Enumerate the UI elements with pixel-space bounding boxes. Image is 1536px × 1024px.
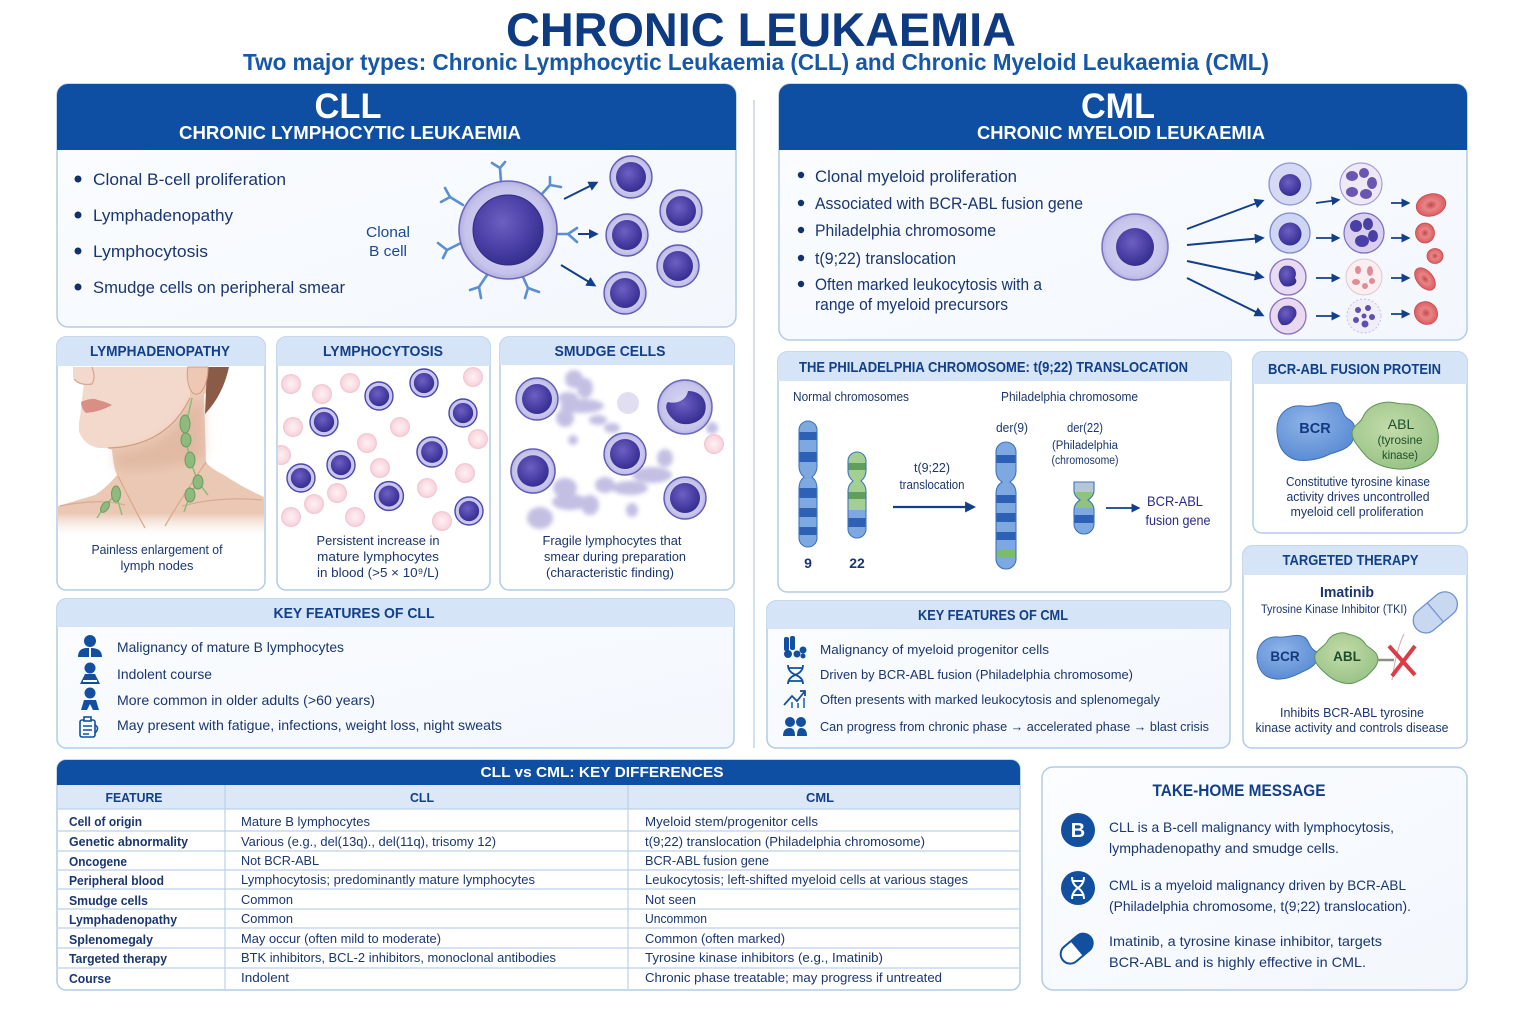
shadow under the jaw (112, 400, 205, 470)
diagram: fusion protein blobs: ABL (1388, 416, 1414, 432)
CML bullet list: Clonal myeloid proliferation (815, 167, 1017, 186)
table rows: Lymphadenopathy (69, 913, 177, 927)
title: CHRONIC LEUKAEMIA (506, 3, 1016, 56)
diagram: BCR-ABL inhibited: ABL (1333, 649, 1361, 664)
table rows: Cell of origin (69, 815, 142, 829)
panel: Philadelphia chromosome: THE PHILADELPHIA CHROMOSOME: t(9;22) TRANSLOCATION (799, 359, 1188, 376)
table rows: Mature B lymphocytes (241, 815, 370, 829)
table rows: Not BCR-ABL (241, 854, 319, 868)
message: imatinib: BCR-ABL and is highly effective in CML. (1109, 954, 1366, 970)
chromosome numbers (804, 555, 865, 571)
translocation label: t(9;22) (914, 461, 950, 475)
icon: B badge (1061, 813, 1095, 847)
panel: Philadelphia chromosome (778, 352, 1231, 592)
hair (205, 367, 229, 414)
caption: kinase activity and controls disease (1256, 721, 1449, 735)
table rows: Splenomegaly (69, 933, 153, 947)
CLL bullet list: Clonal B-cell proliferation (93, 170, 286, 189)
icon: seated person (80, 662, 100, 684)
panel: key features of CML: Malignancy of myeloid progenitor cells (820, 642, 1050, 657)
table rows: May occur (often mild to moderate) (241, 932, 441, 946)
table title bar (57, 760, 1020, 785)
arrow: to fusion gene (1106, 507, 1138, 509)
panel: key features of CLL: Indolent course (117, 666, 212, 682)
panel: key features of CLL (57, 599, 734, 748)
table rows: Not seen (645, 893, 696, 907)
CML bullet list: Philadelphia chromosome (815, 221, 996, 240)
panel: key features of CLL: Malignancy of mature B lymphocytes (117, 639, 344, 655)
ear (187, 367, 208, 394)
der(22) label: der(22) (1067, 421, 1103, 435)
caption (1286, 475, 1430, 519)
panel: targeted therapy: TARGETED THERAPY (1282, 552, 1418, 569)
precursor cells (1269, 163, 1311, 334)
column header row: CML (806, 790, 834, 805)
step arrows (1316, 200, 1408, 316)
column header row (58, 785, 1019, 809)
panel: lymphocytosis (271, 337, 490, 590)
drug name: Tyrosine Kinase Inhibitor (TKI) (1261, 604, 1407, 616)
subtitle: Two major types: Chronic Lymphocytic Leukaemia (CLL) and Chronic Myeloid Leukaemia (CML) (243, 49, 1269, 75)
panel: key features of CML (767, 601, 1230, 748)
table rows: Targeted therapy (69, 952, 167, 966)
diagram: fusion protein blobs: (tyrosine (1378, 433, 1423, 447)
nose (74, 367, 94, 384)
column labels: Philadelphia chromosome (1001, 390, 1138, 404)
table rows (69, 815, 968, 986)
drug name: Imatinib (1320, 584, 1374, 601)
drug name (1261, 584, 1407, 616)
table rows: Smudge cells (69, 894, 148, 908)
icon: B badge: B (1071, 820, 1085, 842)
icon: person with shoulders (78, 635, 102, 657)
table rows: Common (often marked) (645, 932, 785, 946)
CLL header band (57, 84, 736, 150)
translocation label (900, 461, 965, 492)
table rows: Tyrosine kinase inhibitors (e.g., Imatinib) (645, 951, 883, 965)
CML bullet list: t(9;22) translocation (815, 249, 956, 268)
table rows: Genetic abnormality (69, 835, 188, 849)
illustration: neck with enlarged lymph nodes (58, 367, 264, 537)
clonal daughter lymphocytes (604, 156, 702, 314)
caption: activity drives uncontrolled (1286, 490, 1430, 504)
icon: clipboard (80, 717, 98, 737)
der(9) chromosome (995, 441, 1017, 571)
central divider (753, 100, 755, 748)
arrow: translocation (893, 506, 973, 508)
table rows: Various (e.g., del(13q)., del(11q), trisomy 12) (241, 835, 496, 849)
icon: DNA badge (1061, 871, 1095, 905)
panel: lymphadenopathy: LYMPHADENOPATHY (90, 343, 230, 360)
caption: lymph nodes (120, 558, 194, 573)
CML bullet list (798, 167, 1083, 314)
message: CLL: lymphadenopathy and smudge cells. (1109, 840, 1339, 856)
panel: key features of CML: Driven by BCR-ABL fusion (Philadelphia chromosome) (820, 667, 1133, 682)
table rows: Common (241, 893, 293, 907)
table rows: Uncommon (645, 912, 707, 926)
message: CLL: CLL is a B-cell malignancy with lymphocytosis, (1109, 819, 1394, 835)
diagram: BCR-ABL inhibited: BCR (1270, 649, 1300, 664)
lips (81, 399, 112, 413)
caption: (characteristic finding) (546, 565, 674, 580)
CML bullet list: Often marked leukocytosis with a (815, 275, 1042, 294)
table rows: Leukocytosis; left-shifted myeloid cells at various stages (645, 873, 968, 887)
table rows: Myeloid stem/progenitor cells (645, 815, 818, 829)
der(9) label: der(9) (996, 421, 1028, 435)
icon: older adult (81, 688, 99, 710)
chromosome 22 (847, 452, 867, 540)
icon: rising chart (784, 691, 805, 708)
caption (1256, 706, 1449, 735)
panel: smudge cells (500, 337, 734, 590)
panel: take-home message (1042, 767, 1467, 990)
table rows: Peripheral blood (69, 874, 164, 888)
panel: key features of CLL: More common in older adults (>60 years) (117, 692, 375, 708)
der(22) chromosome (1073, 482, 1095, 536)
message: CML: CML is a myeloid malignancy driven by BCR-ABL (1109, 877, 1406, 893)
chromosome numbers: 22 (849, 555, 865, 571)
icon: myeloid cells (784, 636, 806, 658)
column labels: Normal chromosomes (793, 390, 909, 404)
panel: lymphadenopathy (57, 337, 265, 590)
differentiation arrows (1187, 201, 1262, 315)
caption (92, 542, 223, 573)
panel: BCR-ABL fusion protein: BCR-ABL FUSION PROTEIN (1268, 361, 1441, 378)
chromosome numbers: 9 (804, 555, 812, 571)
panel: key features of CML: Can progress from chronic phase → accelerated phase → blast crisis (820, 719, 1209, 734)
maturing granulocytes (1340, 163, 1384, 333)
message: CML: (Philadelphia chromosome, t(9;22) translocation). (1109, 898, 1411, 914)
panel: CML overview (779, 84, 1467, 340)
red blood cells (1410, 190, 1448, 329)
CLL heading: CLL (314, 87, 382, 126)
smudge and intact cells (511, 378, 724, 519)
caption (542, 533, 686, 580)
der(22) label (1052, 421, 1119, 467)
der(22) label: (chromosome) (1052, 455, 1119, 467)
CML full name: CHRONIC MYELOID LEUKAEMIA (977, 122, 1265, 143)
smudged chromatin patches (527, 370, 718, 529)
icon: red cross (1389, 646, 1415, 676)
table rows: BTK inhibitors, BCL-2 inhibitors, monoclonal antibodies (241, 951, 556, 965)
caption: in blood (>5 × 10⁹/L) (317, 565, 439, 580)
caption: myeloid cell proliferation (1290, 505, 1424, 519)
panel: lymphocytosis: LYMPHOCYTOSIS (323, 343, 443, 360)
CML bullet list: range of myeloid precursors (815, 295, 1008, 314)
CLL bullet list (74, 170, 345, 297)
CML bullet list: Associated with BCR-ABL fusion gene (815, 194, 1083, 213)
caption: mature lymphocytes (317, 549, 440, 564)
panel: key features of CLL: May present with fatigue, infections, weight loss, night sweats (117, 717, 502, 733)
message: imatinib: Imatinib, a tyrosine kinase inhibitor, targets (1109, 933, 1382, 949)
chromosome 9 (798, 420, 818, 548)
lymph node chain (97, 398, 208, 518)
table title: CLL vs CML: KEY DIFFERENCES (480, 764, 724, 781)
clonal B cell label: B cell (369, 243, 407, 260)
icon: pill (1408, 587, 1463, 638)
CLL bullet list: Smudge cells on peripheral smear (93, 278, 345, 297)
panel: take-home message: TAKE-HOME MESSAGE (1152, 781, 1326, 800)
arrows from clonal B cell (561, 183, 596, 285)
icon: group of people (783, 717, 807, 736)
diagram: BCR-ABL inhibited (1257, 633, 1415, 684)
table rows: Common (241, 912, 293, 926)
icon: capsule (1057, 930, 1097, 967)
translocation label: translocation (900, 478, 965, 492)
column labels (793, 390, 1138, 404)
diagram: fusion protein blobs (1277, 402, 1438, 469)
icon: clonal B cell with receptors (438, 162, 577, 298)
panel: key features of CLL: KEY FEATURES OF CLL (274, 605, 434, 622)
fusion gene label: BCR-ABL (1147, 493, 1203, 509)
caption: Painless enlargement of (92, 542, 223, 557)
diagram: fusion protein blobs: kinase) (1382, 448, 1418, 462)
table rows: Course (69, 972, 111, 986)
CML heading: CML (1081, 87, 1155, 126)
caption: Constitutive tyrosine kinase (1286, 475, 1430, 489)
message: CLL (1109, 819, 1394, 856)
caption: smear during preparation (544, 549, 686, 564)
caption: Persistent increase in (316, 533, 440, 548)
icon: DNA helix (788, 665, 803, 684)
panel: targeted therapy (1243, 546, 1467, 748)
caption (316, 533, 440, 580)
clonal B cell label (366, 224, 410, 260)
table rows: Oncogene (69, 855, 127, 869)
table rows: Indolent (241, 971, 290, 985)
der(22) label: (Philadelphia (1052, 440, 1119, 452)
CLL bullet list: Lymphocytosis (93, 242, 208, 261)
fusion gene label (1146, 493, 1210, 528)
clonal B cell label: Clonal (366, 224, 410, 241)
caption: Fragile lymphocytes that (542, 533, 682, 548)
table rows: BCR-ABL fusion gene (645, 854, 769, 868)
panel: smudge cells: SMUDGE CELLS (554, 343, 666, 360)
table: CLL vs CML key differences (57, 760, 1020, 990)
column header row: FEATURE (106, 790, 163, 805)
icon: myeloid stem cell (1102, 214, 1168, 280)
blood smear cells (271, 367, 488, 531)
message: CML (1109, 877, 1411, 914)
table rows: t(9;22) translocation (Philadelphia chromosome) (645, 835, 925, 849)
column header row: CLL (410, 790, 434, 805)
panel: BCR-ABL fusion protein (1253, 352, 1467, 533)
table rows: Lymphocytosis; predominantly mature lymphocytes (241, 873, 535, 887)
message: imatinib (1109, 933, 1382, 970)
panel: key features of CML: KEY FEATURES OF CML (918, 607, 1068, 624)
diagram: fusion protein blobs: BCR (1299, 421, 1331, 437)
CML header band (779, 84, 1467, 150)
CLL bullet list: Lymphadenopathy (93, 206, 233, 225)
table rows: Chronic phase treatable; may progress if untreated (645, 971, 942, 985)
panel: key features of CML: Often presents with marked leukocytosis and splenomegaly (820, 692, 1160, 707)
CLL full name: CHRONIC LYMPHOCYTIC LEUKAEMIA (179, 122, 521, 143)
caption: Inhibits BCR-ABL tyrosine (1280, 706, 1424, 720)
panel: CLL overview (57, 84, 736, 327)
fusion gene label: fusion gene (1146, 513, 1210, 528)
